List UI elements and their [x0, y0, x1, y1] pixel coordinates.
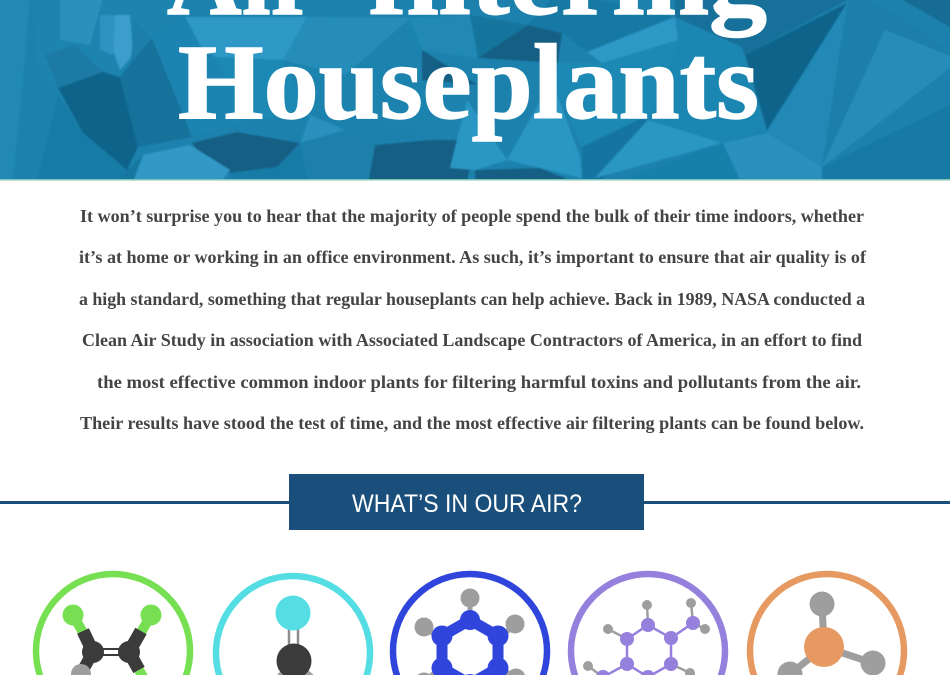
icon: green molecule [36, 574, 190, 675]
intro text block: it’s at home or working in an office environment. As such, it’s important to ensure that air quality is of [79, 247, 867, 267]
title: Houseplants [178, 24, 759, 142]
intro text block: the most effective common indoor plants for filtering harmful toxins and pollutants from the air. [97, 372, 861, 392]
icon: blue hexagon molecule [393, 574, 547, 675]
intro text block [79, 206, 867, 433]
section heading: what's in our air: WHAT’S IN OUR AIR? [352, 490, 582, 518]
section heading: what's in our air [289, 474, 644, 530]
intro text block: a high standard, something that regular houseplants can help achieve. Back in 1989, NASA conducted a [79, 289, 865, 309]
intro text block: It won’t surprise you to hear that the majority of people spend the bulk of their time indoors, whether [80, 206, 864, 226]
intro text block: Clean Air Study in association with Associated Landscape Contractors of America, in an effort to find [82, 330, 862, 350]
icon: orange molecule [750, 574, 904, 675]
icon: cyan molecule [216, 576, 370, 675]
intro text block: Their results have stood the test of time, and the most effective air filtering plants can be found below. [80, 413, 864, 433]
icon: purple molecule [571, 574, 725, 675]
header banner: low-poly blue background [0, 0, 950, 179]
section divider line [0, 501, 950, 504]
header bottom accent line [0, 179, 950, 180]
